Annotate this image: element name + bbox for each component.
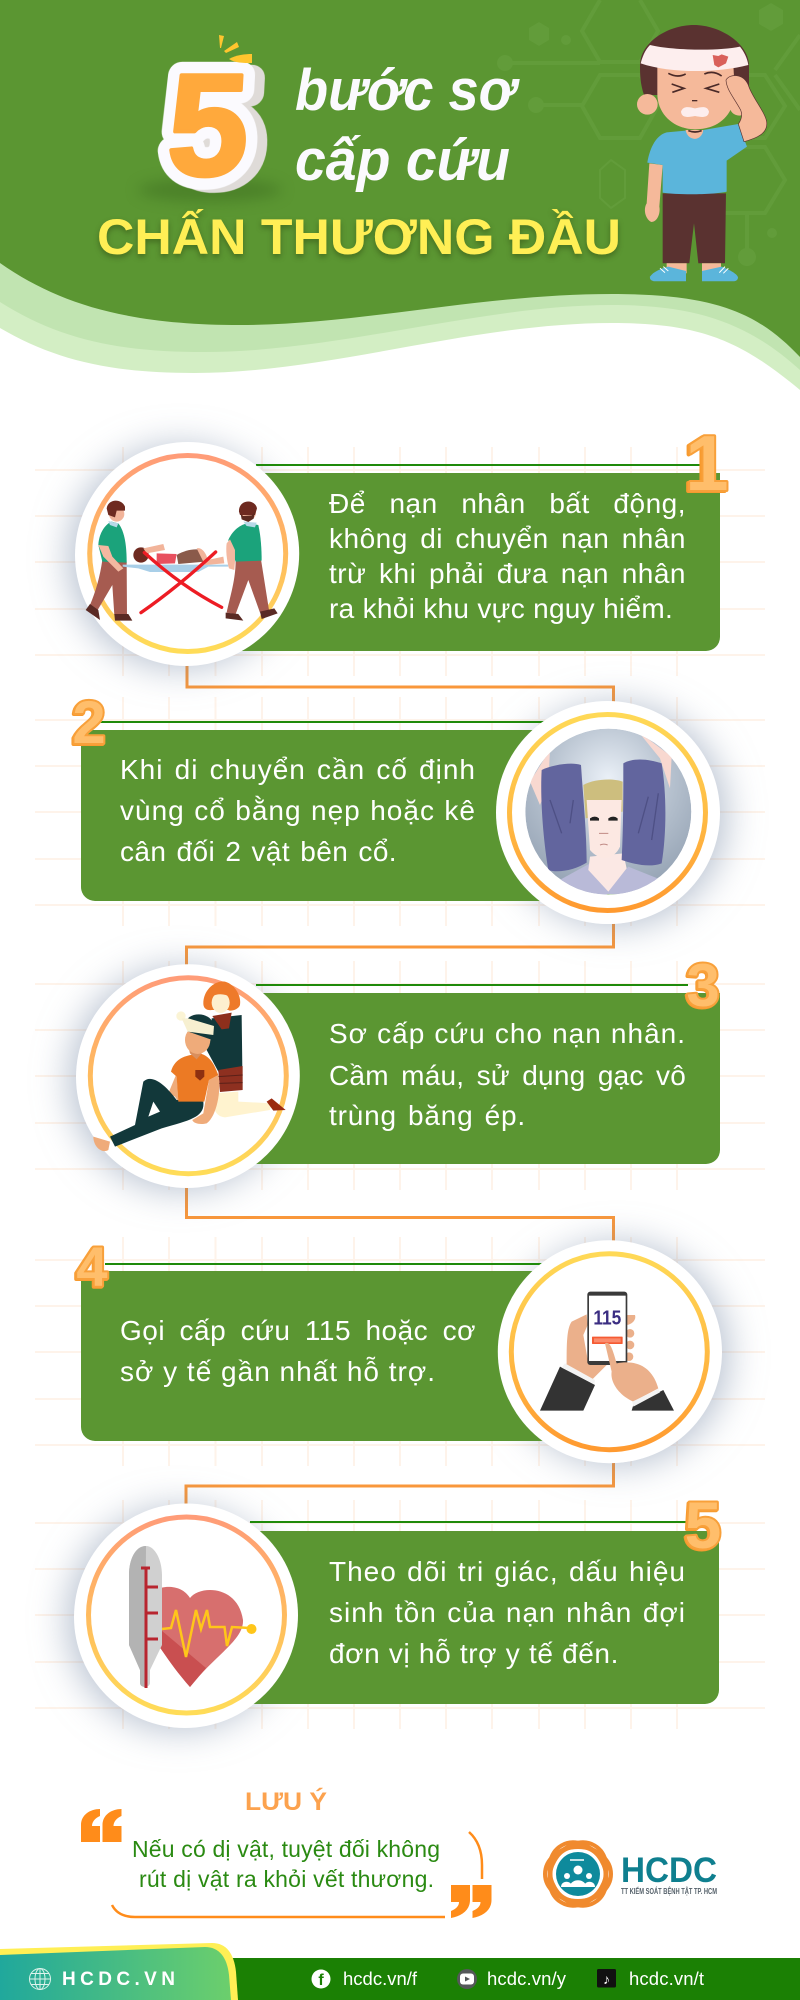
- text: step 1: Để nạn nhân bất động,: [329, 488, 686, 519]
- number 3: 3: [686, 952, 720, 1019]
- connector: step 4 to step 5: [186, 1460, 614, 1508]
- logo subtitle: TT KIỂM SOÁT BỆNH TẬT TP. HCM: [621, 1887, 717, 1896]
- logo emblem: [556, 1852, 600, 1896]
- facebook link: hcdc.vn/f: [343, 1968, 418, 1989]
- circle shadow: [74, 1506, 296, 1728]
- text: step 4: sở y tế gần nhất hỗ trợ.: [120, 1356, 436, 1387]
- website tab border: [0, 1943, 238, 2000]
- text: step 2: vùng cổ bằng nẹp hoặc kê: [120, 795, 476, 826]
- connector: step 1 to step 2: [187, 660, 614, 705]
- ring: [510, 714, 706, 910]
- photo circle: [498, 1240, 721, 1463]
- title line: bước sơ: bước sơ: [295, 58, 521, 123]
- green top line: [250, 1521, 686, 1523]
- icon: tiktok: [597, 1969, 616, 1988]
- circle shadow: [76, 966, 298, 1188]
- circle shadow: [75, 444, 297, 666]
- panel: step 4: [74, 1223, 748, 1485]
- card: [81, 1271, 609, 1441]
- text: step 1: ra khỏi khu vực nguy hiểm.: [329, 593, 673, 624]
- title line: cấp cứu: cấp cứu: [295, 128, 510, 193]
- note heading: LƯU Ý: [245, 1786, 327, 1816]
- icon: facebook: f: [318, 1972, 324, 1989]
- panel: step 1: [49, 419, 729, 688]
- logo wordmark: HCDC: [621, 1851, 717, 1890]
- illustration: head stabilised with pillows: [525, 729, 691, 900]
- footer bar: [0, 1958, 800, 2000]
- website text: HCDC.VN: [62, 1969, 175, 1990]
- big 5 shadow: [138, 178, 282, 202]
- illustration: two men carrying a stretcher, crossed out: [86, 501, 278, 621]
- text: step 2: Khi di chuyển cần cố định: [120, 754, 476, 785]
- text: step 2: [120, 754, 476, 867]
- number 1: 1: [685, 419, 729, 507]
- text: step 3: trùng băng ép.: [329, 1100, 526, 1131]
- note text line 1: Nếu có dị vật, tuyệt đối không: [132, 1836, 440, 1862]
- icon: youtube: [457, 1969, 477, 1989]
- text: step 1: [329, 488, 686, 624]
- number 4: 4: [76, 1235, 108, 1298]
- illustration: heart and thermometer: [129, 1546, 256, 1688]
- icon: facebook: [312, 1970, 330, 1989]
- illustration: hand dialing 115 on a phone: 115: [593, 1307, 621, 1329]
- green top line: [256, 464, 700, 466]
- green top line: [100, 721, 545, 723]
- number 2: 2: [72, 689, 106, 756]
- green top line: [105, 1263, 545, 1265]
- text: step 5: Theo dõi tri giác, dấu hiệu: [329, 1556, 686, 1587]
- tiktok link: hcdc.vn/t: [629, 1968, 704, 1989]
- connector: step 3 to step 4: [186, 1185, 614, 1245]
- panel: step 2: [71, 684, 746, 946]
- big number 5: 5: [164, 44, 253, 206]
- ring: [90, 978, 286, 1174]
- icon: closing quote: [451, 1885, 492, 1918]
- panel: step 3: [50, 948, 720, 1210]
- illustration: injured boy: [637, 25, 767, 281]
- big number 5 backing: 5: [164, 44, 253, 206]
- number 5: 5: [685, 1488, 721, 1562]
- text: step 3: [329, 1018, 686, 1131]
- hexagon pattern: [499, 0, 800, 264]
- logo ring: [538, 1832, 618, 1916]
- text: step 2: cân đối 2 vật bên cổ.: [120, 836, 397, 867]
- text: step 1: trừ khi phải đưa nạn nhân: [329, 558, 686, 589]
- sparks: [219, 35, 252, 63]
- card: [187, 473, 720, 651]
- text: step 4: Gọi cấp cứu 115 hoặc cơ: [120, 1315, 476, 1346]
- panel: step 5: [48, 1488, 722, 1750]
- ring: [88, 1517, 284, 1713]
- wave: light band: [0, 0, 800, 390]
- youtube link: hcdc.vn/y: [487, 1968, 567, 1989]
- card: [81, 730, 607, 901]
- card: [187, 1531, 719, 1704]
- text: step 3: Sơ cấp cứu cho nạn nhân.: [329, 1018, 686, 1049]
- green top line: [256, 984, 688, 986]
- illustration: hand dialing 115 on a phone: [540, 1292, 674, 1411]
- header banner: [0, 0, 800, 390]
- text: step 5: [329, 1556, 686, 1669]
- text: step 1: không di chuyển nạn nhân: [329, 523, 686, 554]
- photo circle: [77, 964, 300, 1187]
- wave: mid band: [0, 0, 800, 370]
- circle shadow: [498, 702, 720, 924]
- icon: tiktok: ♪: [603, 1971, 610, 1987]
- card: [188, 993, 720, 1164]
- text: step 4: [120, 1315, 476, 1387]
- photo circle: [76, 442, 299, 665]
- icon: opening quote: [81, 1809, 122, 1842]
- note text line 2: rút dị vật ra khỏi vết thương.: [139, 1866, 434, 1892]
- title line: chấn thương đầu: CHẤN THƯƠNG ĐẦU: [97, 209, 621, 265]
- text: step 5: sinh tồn của nạn nhân đợi: [329, 1597, 686, 1628]
- note frame: [112, 1832, 482, 1917]
- ring: [511, 1254, 707, 1450]
- text: step 5: đơn vị hỗ trợ y tế đến.: [329, 1638, 619, 1669]
- website tab: [0, 1947, 231, 2000]
- photo circle: [496, 701, 719, 924]
- text: step 3: Cầm máu, sử dụng gạc vô: [329, 1060, 686, 1091]
- wave: green header background: [0, 0, 800, 357]
- photo circle: [75, 1504, 298, 1726]
- connector: step 2 to step 3: [186, 920, 614, 968]
- illustration: woman bandaging a seated man: [93, 981, 286, 1151]
- icon: globe: [30, 1968, 50, 1990]
- circle shadow: [500, 1241, 722, 1463]
- ring: [90, 456, 286, 652]
